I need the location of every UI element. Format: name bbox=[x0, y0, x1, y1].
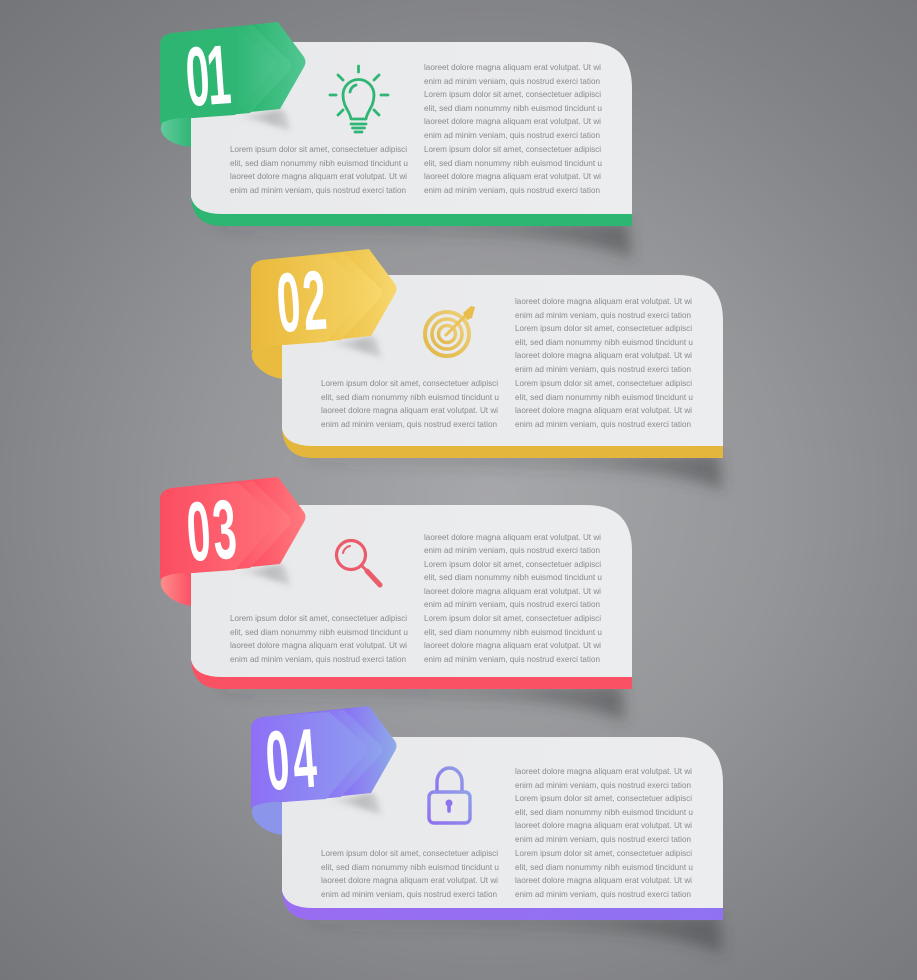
text: left column: elit, sed diam nonummy nibh euismod tincidunt u bbox=[321, 392, 499, 402]
card shadow bbox=[205, 685, 625, 722]
text: right column: laoreet dolore magna aliquam erat volutpat. Ut wi bbox=[515, 766, 692, 776]
text: right column bbox=[424, 62, 602, 195]
text: left column: Lorem ipsum dolor sit amet, consectetuer adipisci bbox=[321, 848, 498, 858]
text: right column: elit, sed diam nonummy nibh euismod tincidunt u bbox=[424, 103, 602, 113]
text: left column: elit, sed diam nonummy nibh euismod tincidunt u bbox=[230, 627, 408, 637]
card body bbox=[282, 737, 723, 920]
text: right column: elit, sed diam nonummy nibh euismod tincidunt u bbox=[515, 392, 693, 402]
text: left column bbox=[230, 613, 408, 664]
text: left column: enim ad minim veniam, quis nostrud exerci tation bbox=[230, 654, 406, 664]
ribbon 03 bbox=[160, 477, 306, 579]
text: right column: Lorem ipsum dolor sit amet, consectetuer adipisci bbox=[515, 378, 692, 388]
text: right column: laoreet dolore magna aliquam erat volutpat. Ut wi bbox=[424, 640, 601, 650]
text: right column: laoreet dolore magna aliquam erat volutpat. Ut wi bbox=[515, 405, 692, 415]
text: right column: enim ad minim veniam, quis nostrud exerci tation bbox=[424, 130, 600, 140]
text: left column: laoreet dolore magna aliquam erat volutpat. Ut wi bbox=[321, 405, 498, 415]
ribbon 02 bbox=[251, 249, 396, 351]
text: right column: elit, sed diam nonummy nibh euismod tincidunt u bbox=[424, 158, 602, 168]
text: left column bbox=[321, 848, 499, 899]
card shadow bbox=[296, 916, 723, 954]
ribbon curl bbox=[252, 800, 286, 835]
icon: padlock bbox=[429, 768, 470, 823]
text: right column: Lorem ipsum dolor sit amet, consectetuer adipisci bbox=[515, 323, 692, 333]
ribbon curl bbox=[252, 343, 286, 379]
number 03: 03 bbox=[184, 483, 240, 580]
text: right column bbox=[515, 296, 693, 429]
ribbon shadow bbox=[235, 564, 290, 586]
number 04: 04 bbox=[263, 712, 320, 809]
ribbon curl bbox=[161, 571, 195, 606]
text: right column: enim ad minim veniam, quis nostrud exerci tation bbox=[515, 780, 691, 790]
text: right column: Lorem ipsum dolor sit amet, consectetuer adipisci bbox=[515, 848, 692, 858]
number 02: 02 bbox=[274, 254, 330, 351]
panel: step 01 bbox=[160, 22, 632, 258]
text: right column: enim ad minim veniam, quis nostrud exerci tation bbox=[424, 599, 600, 609]
text: right column: elit, sed diam nonummy nibh euismod tincidunt u bbox=[515, 337, 693, 347]
text: left column: Lorem ipsum dolor sit amet, consectetuer adipisci bbox=[230, 613, 407, 623]
text: right column: elit, sed diam nonummy nibh euismod tincidunt u bbox=[515, 862, 693, 872]
ribbon shadow bbox=[235, 109, 290, 131]
card body bbox=[282, 275, 723, 458]
text: right column: elit, sed diam nonummy nibh euismod tincidunt u bbox=[515, 807, 693, 817]
text: right column: laoreet dolore magna aliquam erat volutpat. Ut wi bbox=[515, 296, 692, 306]
card body bbox=[191, 505, 632, 689]
text: right column: enim ad minim veniam, quis nostrud exerci tation bbox=[424, 545, 600, 555]
card shadow bbox=[296, 454, 723, 490]
text: right column: Lorem ipsum dolor sit amet, consectetuer adipisci bbox=[424, 89, 601, 99]
text: right column: enim ad minim veniam, quis nostrud exerci tation bbox=[515, 419, 691, 429]
icon: magnifier bbox=[336, 540, 380, 585]
text: right column: laoreet dolore magna aliquam erat volutpat. Ut wi bbox=[424, 116, 601, 126]
text: right column: enim ad minim veniam, quis nostrud exerci tation bbox=[515, 364, 691, 374]
text: left column: elit, sed diam nonummy nibh euismod tincidunt u bbox=[321, 862, 499, 872]
panel: step 04 bbox=[251, 706, 723, 954]
text: right column: laoreet dolore magna aliquam erat volutpat. Ut wi bbox=[424, 62, 601, 72]
text: right column: laoreet dolore magna aliquam erat volutpat. Ut wi bbox=[515, 820, 692, 830]
text: left column: enim ad minim veniam, quis nostrud exerci tation bbox=[321, 889, 497, 899]
icon: light bulb bbox=[330, 66, 388, 132]
text: right column bbox=[424, 532, 602, 664]
text: left column: laoreet dolore magna aliquam erat volutpat. Ut wi bbox=[321, 875, 498, 885]
ribbon 01 bbox=[160, 22, 306, 124]
ribbon curl bbox=[161, 116, 195, 147]
text: left column: enim ad minim veniam, quis nostrud exerci tation bbox=[321, 419, 497, 429]
text: right column: enim ad minim veniam, quis nostrud exerci tation bbox=[424, 185, 600, 195]
card body bbox=[191, 42, 632, 226]
text: right column: laoreet dolore magna aliquam erat volutpat. Ut wi bbox=[424, 586, 601, 596]
text: right column: laoreet dolore magna aliquam erat volutpat. Ut wi bbox=[515, 350, 692, 360]
text: right column: enim ad minim veniam, quis nostrud exerci tation bbox=[424, 654, 600, 664]
text: left column: Lorem ipsum dolor sit amet, consectetuer adipisci bbox=[321, 378, 498, 388]
text: left column: laoreet dolore magna aliquam erat volutpat. Ut wi bbox=[230, 171, 407, 181]
text: left column: Lorem ipsum dolor sit amet, consectetuer adipisci bbox=[230, 144, 407, 154]
text: right column: enim ad minim veniam, quis nostrud exerci tation bbox=[515, 834, 691, 844]
ribbon shadow bbox=[326, 793, 381, 815]
icon: target bbox=[425, 306, 475, 356]
text: right column: enim ad minim veniam, quis nostrud exerci tation bbox=[424, 76, 600, 86]
text: right column: laoreet dolore magna aliquam erat volutpat. Ut wi bbox=[424, 171, 601, 181]
text: left column: laoreet dolore magna aliquam erat volutpat. Ut wi bbox=[230, 640, 407, 650]
text: right column: Lorem ipsum dolor sit amet, consectetuer adipisci bbox=[424, 144, 601, 154]
text: left column bbox=[321, 378, 499, 429]
text: left column: elit, sed diam nonummy nibh euismod tincidunt u bbox=[230, 158, 408, 168]
text: right column: elit, sed diam nonummy nibh euismod tincidunt u bbox=[424, 627, 602, 637]
ribbon 04 bbox=[251, 706, 396, 808]
text: right column: Lorem ipsum dolor sit amet, consectetuer adipisci bbox=[424, 613, 601, 623]
panel: step 03 bbox=[160, 477, 632, 722]
text: right column: enim ad minim veniam, quis nostrud exerci tation bbox=[515, 889, 691, 899]
text: left column: enim ad minim veniam, quis nostrud exerci tation bbox=[230, 185, 406, 195]
text: right column: laoreet dolore magna aliquam erat volutpat. Ut wi bbox=[424, 532, 601, 542]
text: right column: Lorem ipsum dolor sit amet, consectetuer adipisci bbox=[515, 793, 692, 803]
text: right column bbox=[515, 766, 693, 899]
text: right column: elit, sed diam nonummy nibh euismod tincidunt u bbox=[424, 572, 602, 582]
panel: step 02 bbox=[251, 249, 723, 490]
text: right column: Lorem ipsum dolor sit amet, consectetuer adipisci bbox=[424, 559, 601, 569]
text: right column: enim ad minim veniam, quis nostrud exerci tation bbox=[515, 310, 691, 320]
ribbon shadow bbox=[326, 336, 381, 358]
card shadow bbox=[205, 222, 632, 258]
number 01: 01 bbox=[183, 28, 234, 125]
text: right column: laoreet dolore magna aliquam erat volutpat. Ut wi bbox=[515, 875, 692, 885]
text: left column bbox=[230, 144, 408, 195]
